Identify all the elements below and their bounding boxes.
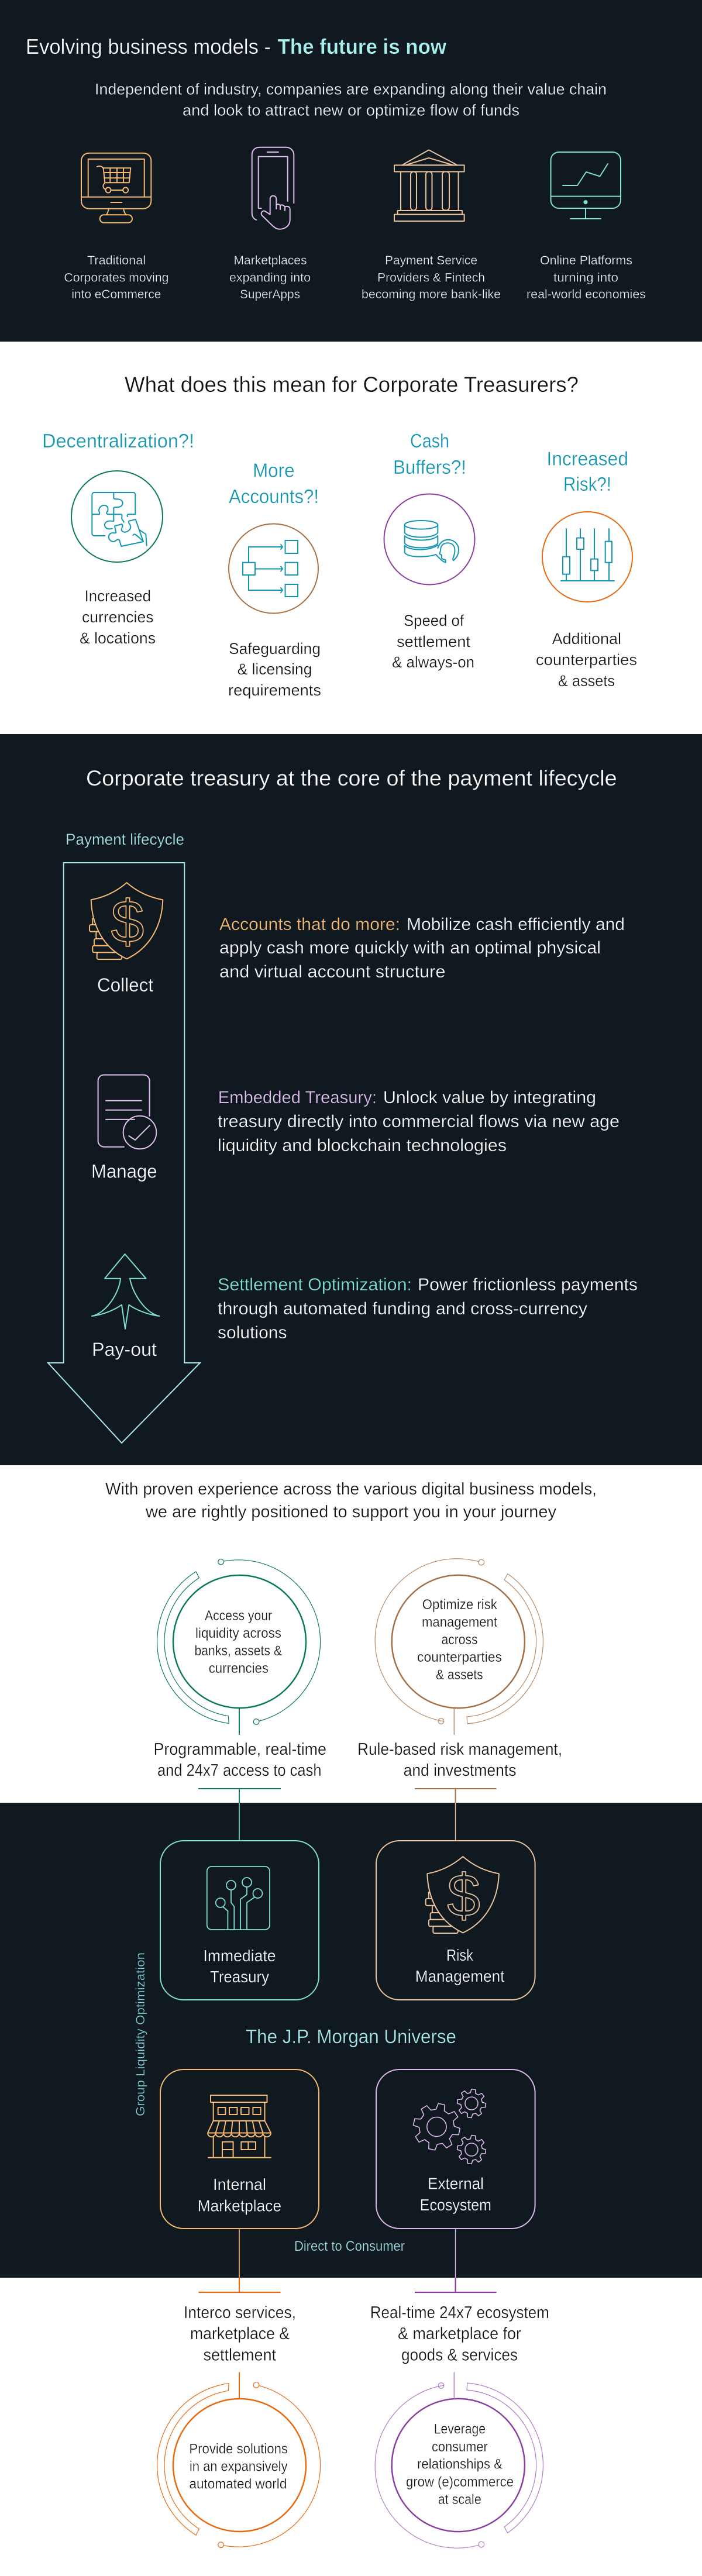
label: direct to consumer: Direct to Consumer — [294, 2238, 405, 2254]
column: more accounts: requirements — [228, 681, 321, 699]
icon: smartphone with pointing hand — [252, 147, 294, 229]
icon: shield with dollar and coins: $ — [111, 888, 144, 955]
text: real-time ecosystem: goods & services — [401, 2346, 518, 2365]
text: accounts that do more: Accounts that do more: — [219, 915, 400, 934]
circle: consumer relationships: at scale — [438, 2492, 481, 2508]
icon: monitor with line chart — [551, 152, 621, 219]
text: settlement optimization — [218, 1275, 638, 1342]
caption: marketplaces: Marketplaces — [234, 253, 307, 267]
column: increased risk — [536, 448, 637, 690]
circle: automated world: automated world — [189, 2477, 287, 2492]
icon: storefront — [208, 2095, 271, 2158]
connectors: lower stems — [239, 2229, 456, 2278]
text: embedded treasury — [218, 1088, 620, 1155]
icon: circuit — [207, 1866, 270, 1930]
circle: liquidity access: currencies — [209, 1661, 269, 1676]
caption: payment service providers: becoming more bank-like — [362, 287, 501, 301]
caption: payment service providers — [362, 253, 501, 301]
card: risk management: Risk — [446, 1946, 474, 1964]
text: settlement optimization: solutions — [218, 1323, 287, 1342]
circle: consumer relationships: relationships & — [417, 2457, 503, 2472]
card: immediate treasury: Treasury — [210, 1968, 269, 1986]
intro text — [95, 81, 607, 119]
column: cash buffers: Buffers?! — [393, 456, 466, 478]
circle: risk optimisation: management — [422, 1614, 497, 1630]
column: cash buffers: Cash — [410, 430, 449, 452]
caption: traditional corporates: Corporates moving — [64, 270, 168, 284]
text: embedded treasury: liquidity and blockchain technologies — [218, 1136, 507, 1155]
text: embedded treasury: Embedded Treasury: — [218, 1088, 377, 1107]
text: embedded treasury: treasury directly into commercial flows via new age — [218, 1112, 620, 1131]
intro text: Independent of industry, companies are expanding along their value chain — [95, 81, 607, 98]
column: more accounts — [228, 460, 321, 699]
column: decentralization: Increased — [85, 587, 151, 605]
text: real-time ecosystem: & marketplace for — [398, 2324, 521, 2343]
icon: branching payout arrow — [92, 1254, 159, 1329]
card: external ecosystem: External — [428, 2175, 484, 2193]
text: settlement optimization: Settlement Optimization: — [218, 1275, 412, 1294]
heading: the j.p. morgan universe: The J.P. Morgan Universe — [246, 2026, 456, 2047]
title: Evolving business models - — [26, 35, 271, 58]
icon: shield with dollar and coins — [90, 883, 163, 959]
text: rule-based risk — [357, 1740, 562, 1780]
circle: liquidity access: Access your — [205, 1608, 272, 1624]
column: cash buffers: settlement — [397, 633, 471, 650]
icon: shield with dollar: $ — [447, 1862, 480, 1929]
circle: liquidity access: banks, assets & — [194, 1643, 282, 1659]
card: external ecosystem — [376, 2069, 535, 2229]
panel: positioned to support — [105, 1480, 597, 1803]
connector: t-bars — [198, 1789, 497, 1803]
card: immediate treasury — [160, 1841, 319, 2000]
label: collect: Collect — [97, 974, 153, 996]
column: increased risk: Risk?! — [563, 473, 611, 495]
caption: traditional corporates: Traditional — [87, 253, 146, 267]
card: immediate treasury: Immediate — [204, 1947, 276, 1965]
title: The future is now — [277, 35, 447, 58]
panel: what this means for treasurers — [42, 373, 637, 699]
text: settlement optimization: Power frictionless payments — [418, 1275, 638, 1294]
circle: liquidity access — [157, 1559, 321, 1735]
circle: consumer relationships: Leverage — [434, 2422, 486, 2437]
column: cash buffers: Speed of — [404, 612, 464, 629]
label: group liquidity optimization: Group Liquidity Optimization — [134, 1952, 147, 2116]
caption: marketplaces — [229, 253, 311, 301]
connectors: upper stems — [239, 1803, 456, 1841]
icon: gears — [409, 2088, 487, 2165]
circle: consumer relationships — [375, 2372, 543, 2548]
intro text: and look to attract new or optimize flow of funds — [183, 102, 519, 119]
column: more accounts: More — [253, 460, 295, 481]
caption: online platforms: turning into — [553, 270, 618, 284]
circle: liquidity access: liquidity across — [195, 1626, 281, 1641]
text: accounts that do more: Mobilize cash efficiently and — [407, 915, 625, 934]
column: more accounts: Safeguarding — [229, 640, 321, 657]
caption: online platforms: real-world economies — [526, 287, 646, 301]
panel: the j.p. morgan universe — [134, 1803, 535, 2278]
connector: t-bars — [198, 2278, 497, 2292]
arrow: lifecycle flow — [48, 863, 200, 1443]
icon: account hierarchy — [243, 540, 298, 597]
label: manage: Manage — [91, 1160, 157, 1182]
text: accounts that do more — [219, 915, 625, 982]
heading: we are rightly positioned to support you in your journey — [145, 1503, 556, 1521]
heading: Corporate treasury at the core of the payment lifecycle — [86, 766, 617, 790]
column: decentralization — [42, 430, 194, 647]
panel: evolving business models — [26, 35, 646, 301]
text: interco services — [184, 2303, 296, 2365]
circle: consumer relationships: consumer — [432, 2439, 488, 2455]
text: interco services: settlement — [204, 2346, 276, 2365]
card: risk management — [376, 1841, 535, 2000]
text: programmable access — [153, 1740, 326, 1780]
caption: payment service providers: Providers & Fintech — [377, 270, 485, 284]
caption: marketplaces: expanding into — [229, 270, 311, 284]
text: embedded treasury: Unlock value by integrating — [383, 1088, 596, 1107]
column: decentralization: currencies — [82, 608, 153, 626]
column: decentralization: Decentralization?! — [42, 430, 194, 452]
card: internal marketplace: Internal — [213, 2175, 266, 2193]
icon: monitor with shopping cart — [81, 153, 151, 223]
icon: shield with dollar — [426, 1857, 499, 1933]
title — [26, 35, 447, 58]
card: external ecosystem: Ecosystem — [420, 2196, 491, 2214]
column: more accounts: Accounts?! — [229, 485, 319, 507]
caption: traditional corporates: into eCommerce — [71, 287, 161, 301]
label: pay-out: Pay-out — [92, 1339, 157, 1360]
card: internal marketplace — [160, 2069, 319, 2229]
circle: risk optimisation — [375, 1559, 543, 1735]
text: real-time ecosystem: Real-time 24x7 ecosystem — [370, 2303, 549, 2322]
text: accounts that do more: apply cash more quickly with an optimal physical — [219, 938, 601, 958]
text: settlement optimization: through automated funding and cross-currency — [218, 1299, 587, 1318]
circle: consumer relationships: grow (e)commerce — [406, 2474, 514, 2490]
column: increased risk: Increased — [546, 448, 628, 469]
text: interco services: marketplace & — [190, 2324, 290, 2343]
icon: candlestick chart — [561, 529, 614, 581]
text: programmable access: Programmable, real-time — [153, 1740, 326, 1759]
circle: risk optimisation: Optimize risk — [422, 1597, 498, 1613]
column: cash buffers — [384, 430, 475, 671]
text: real-time ecosystem — [370, 2303, 549, 2365]
panel: bottom services — [157, 2278, 549, 2548]
icon: database with refresh arrow — [405, 521, 459, 563]
circle: risk optimisation: & assets — [436, 1667, 483, 1683]
heading: With proven experience across the various digital business models, — [105, 1480, 597, 1499]
caption: marketplaces: SuperApps — [240, 287, 300, 301]
text: interco services: Interco services, — [184, 2303, 296, 2322]
circle: automated world: in an expansively — [190, 2459, 288, 2474]
icon: document with check — [98, 1075, 156, 1149]
text: accounts that do more: and virtual account structure — [219, 962, 446, 982]
text: rule-based risk: and investments — [404, 1761, 516, 1780]
circle: automated world — [157, 2372, 321, 2548]
heading — [105, 1480, 597, 1521]
column: increased risk: counterparties — [536, 651, 637, 669]
column: more accounts: & licensing — [238, 660, 312, 678]
icon: bank building — [394, 150, 464, 221]
icon: puzzle — [92, 493, 147, 546]
text: rule-based risk: Rule-based risk management, — [357, 1740, 562, 1759]
circle: risk optimisation: across — [441, 1632, 477, 1648]
card: risk management: Management — [415, 1967, 505, 1985]
card: internal marketplace: Marketplace — [198, 2197, 281, 2215]
column: decentralization: & locations — [80, 629, 156, 647]
text: programmable access: and 24x7 access to cash — [157, 1761, 322, 1780]
caption: online platforms: Online Platforms — [540, 253, 632, 267]
circle: risk optimisation: counterparties — [417, 1649, 502, 1665]
heading: What does this mean for Corporate Treasurers? — [125, 373, 579, 397]
caption: traditional corporates — [64, 253, 168, 301]
column: cash buffers: & always-on — [392, 653, 474, 671]
column: increased risk: & assets — [558, 672, 615, 690]
label: payment lifecycle: Payment lifecycle — [66, 831, 184, 848]
circle: automated world: Provide solutions — [189, 2441, 288, 2457]
panel: payment lifecycle — [48, 766, 638, 1443]
caption: payment service providers: Payment Service — [385, 253, 477, 267]
caption: online platforms — [526, 253, 646, 301]
column: increased risk: Additional — [552, 630, 621, 648]
